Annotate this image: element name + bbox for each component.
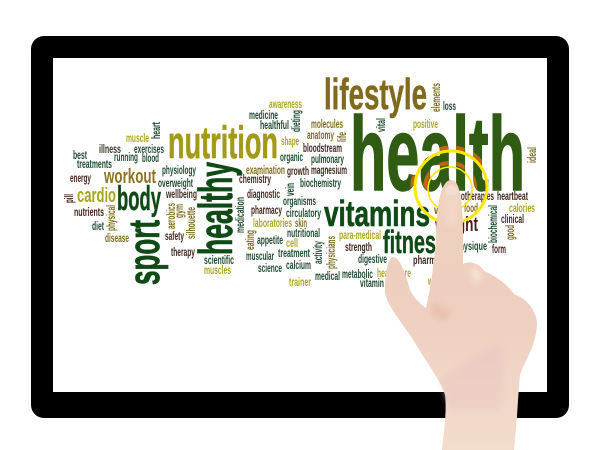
small horizontal words: treatments <box>77 159 112 171</box>
small horizontal words: organisms <box>283 196 316 208</box>
small horizontal words: growth <box>287 166 309 178</box>
small horizontal words: metabolic <box>342 269 373 281</box>
small horizontal words: loss <box>443 101 456 113</box>
small horizontal words: heartbeat <box>497 191 528 203</box>
small horizontal words: healthcare <box>377 268 411 280</box>
small horizontal words: nutritional <box>287 228 320 240</box>
word cloud <box>64 70 539 290</box>
word: sport: sport <box>120 220 169 285</box>
small horizontal words: nutrients <box>74 207 104 219</box>
small horizontal words: physiology <box>162 165 196 177</box>
small horizontal words: calcium <box>286 260 311 272</box>
small horizontal words: energy <box>70 173 91 185</box>
small horizontal words: magnesium <box>311 165 347 177</box>
small horizontal words <box>70 99 535 290</box>
small horizontal words: para-medical <box>339 230 381 242</box>
small horizontal words: treatment <box>278 248 310 260</box>
word: vitamins: vitamins <box>324 193 430 234</box>
word: fitness: fitness <box>383 224 447 260</box>
tablet screen <box>53 58 547 392</box>
small rotated words <box>64 83 539 269</box>
small horizontal words: pharmacy <box>251 205 282 217</box>
small horizontal words: physique <box>455 241 487 253</box>
small rotated words: heart <box>151 122 163 139</box>
small horizontal words: strength <box>345 242 372 254</box>
small horizontal words: pulmonary <box>311 154 344 166</box>
small horizontal words: disease <box>105 233 129 245</box>
small horizontal words: bloodstream <box>303 143 342 155</box>
small horizontal words: calories <box>509 203 535 215</box>
small horizontal words: pharmacist <box>413 255 453 267</box>
small rotated words: medication <box>235 197 247 233</box>
small horizontal words: science <box>258 263 282 275</box>
small horizontal words: blood <box>142 153 159 165</box>
hand silhouette <box>385 180 537 450</box>
small horizontal words: circulatory <box>286 208 321 220</box>
word: weight: weight <box>434 214 478 236</box>
word: body: body <box>117 180 161 218</box>
word: lifestyle: lifestyle <box>324 70 427 119</box>
small horizontal words: muscle <box>126 133 149 145</box>
word: cardio: cardio <box>77 185 116 207</box>
small horizontal words: diet <box>92 221 104 233</box>
small horizontal words: healthful <box>260 120 289 132</box>
word: healthy: healthy <box>189 162 242 255</box>
small rotated words: ideal <box>527 147 539 163</box>
small horizontal words: overweight <box>158 178 193 190</box>
small horizontal words: laboratories <box>253 218 292 230</box>
small horizontal words: skin <box>295 218 307 230</box>
small rotated words: activity <box>313 241 325 264</box>
small horizontal words: therapy <box>171 247 195 259</box>
hand pointing <box>385 180 537 450</box>
fingernail <box>445 185 458 195</box>
word: nutrition: nutrition <box>168 117 278 168</box>
small rotated words: good <box>505 225 517 240</box>
small horizontal words: molecules <box>311 119 343 131</box>
small rotated words: gym <box>174 204 186 218</box>
small horizontal words: cell <box>286 238 298 250</box>
small horizontal words: psychotherapies <box>442 191 494 203</box>
small horizontal words: well <box>433 205 452 217</box>
orange ring glow over letters <box>410 146 482 190</box>
small rotated words: elements <box>431 83 443 112</box>
small horizontal words: food <box>464 203 478 215</box>
small horizontal words: running <box>114 152 138 164</box>
small horizontal words: vitamin <box>360 278 384 290</box>
small horizontal words: anatomy <box>307 130 334 142</box>
small horizontal words: clinical <box>501 214 524 226</box>
small rotated words: dieting <box>291 110 303 132</box>
small rotated words: silhouette <box>186 207 198 239</box>
small rotated words: vein <box>285 183 297 196</box>
small horizontal words: medical <box>315 271 340 283</box>
small horizontal words: safety <box>165 231 184 243</box>
small horizontal words: wellness <box>427 276 452 288</box>
touch rings <box>412 148 490 224</box>
small horizontal words: illness <box>99 144 121 156</box>
small rotated words: biochemical <box>488 205 500 243</box>
tablet frame <box>31 36 569 418</box>
small rotated words: physical <box>106 205 118 231</box>
small horizontal words: medicine <box>249 110 278 122</box>
small horizontal words: awareness <box>269 99 302 111</box>
word: workout: workout <box>103 166 156 188</box>
small rotated words: physicians <box>326 236 338 269</box>
small horizontal words: wellbeing <box>165 189 197 201</box>
small horizontal words: shape <box>281 136 299 148</box>
small horizontal words: form <box>492 244 506 256</box>
small rotated words: life <box>337 132 349 142</box>
small horizontal words: scientific <box>204 255 234 267</box>
small rotated words: aerobics <box>166 203 178 229</box>
small rotated words: vital <box>376 118 388 132</box>
small horizontal words: digestive <box>358 254 387 266</box>
small horizontal words: biochemistry <box>300 178 341 190</box>
small horizontal words: organic <box>280 152 303 164</box>
small horizontal words: exercises <box>134 144 164 156</box>
small horizontal words: examination <box>246 165 285 177</box>
hand shading <box>430 187 505 410</box>
small rotated words: eating <box>245 230 257 250</box>
small horizontal words: muscles <box>204 265 231 277</box>
small horizontal words: chemistry <box>239 174 271 186</box>
outer yellow ring <box>415 151 487 223</box>
small rotated words: pill <box>64 194 76 203</box>
small horizontal words: best <box>73 150 87 162</box>
small horizontal words: diagnostic <box>247 189 280 201</box>
small horizontal words: muscular <box>246 251 274 263</box>
small horizontal words: trainer <box>289 277 311 289</box>
small horizontal words: appetite <box>257 235 283 247</box>
small horizontal words: positive <box>413 119 438 131</box>
inner yellow ring <box>428 167 472 211</box>
